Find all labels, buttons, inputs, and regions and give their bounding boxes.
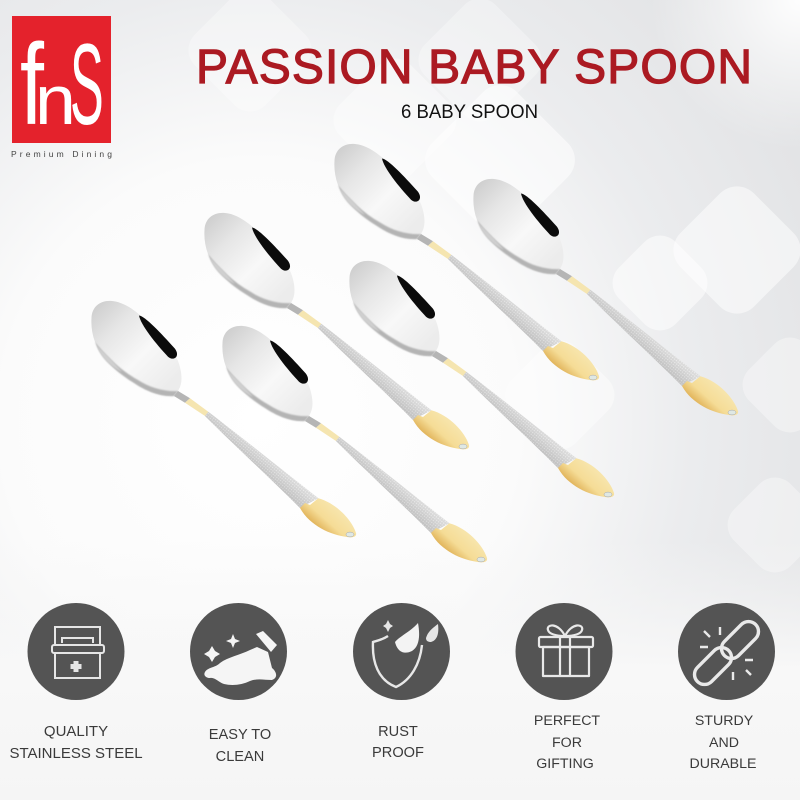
logo letters fnS: n [35,62,76,140]
label: FOR [552,735,582,751]
label: AND [709,735,739,751]
logo tagline: Premium Dining [11,149,112,159]
feature: sturdy and durable [678,603,775,772]
spoon 5 [334,144,599,380]
label: RUST [378,724,418,740]
label: GIFTING [536,756,594,772]
feature: perfect for gifting [516,603,612,772]
feature: quality stainless steel [9,603,143,762]
logo [11,16,112,159]
spoon 1 [91,301,356,537]
logo letters fnS: S [70,20,104,149]
label: PERFECT [534,713,600,729]
label: CLEAN [216,749,264,765]
label: DURABLE [689,756,757,772]
spoon 2 [222,326,487,562]
icon: shield with leaf and drop [353,603,450,700]
feature: rust proof [353,603,450,761]
spoon 4 [349,261,614,497]
logo letters fnS [20,20,104,149]
spoon 3 [204,213,469,449]
icon: toolbox [28,603,124,700]
icon: cleaning bottle and spill [190,603,287,700]
label: STAINLESS STEEL [9,745,143,762]
logo letters fnS: f [20,20,45,149]
label: STURDY [695,713,754,729]
spoon 6 [473,179,738,415]
title: PASSION BABY SPOON [196,41,752,94]
spoons group [91,144,738,562]
label: PROOF [372,745,424,761]
subtitle: 6 BABY SPOON [401,102,538,123]
icon: gift box [516,603,612,700]
label: QUALITY [44,723,108,740]
logo red square [12,16,111,143]
icon: broken chain link [678,603,775,700]
feature: easy to clean [190,603,287,765]
label: EASY TO [209,727,271,743]
